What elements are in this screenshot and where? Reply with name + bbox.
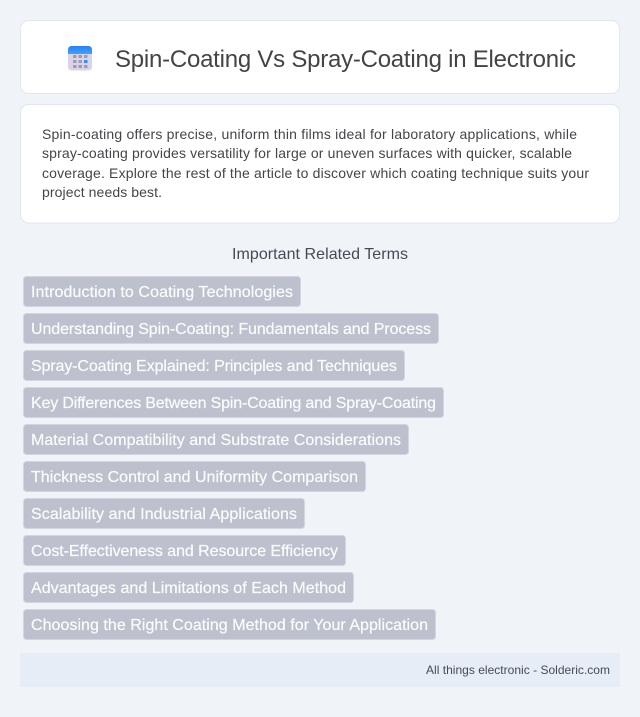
text block: introduction: Spin-coating offers precise, uniform thin films ideal for laboratory applications, while bbox=[42, 126, 577, 142]
tag: thickness control bbox=[24, 462, 366, 492]
tag: introduction bbox=[24, 276, 300, 306]
tag: advantages and limitations bbox=[24, 572, 354, 602]
tag: thickness control: Thickness Control and Uniformity Comparison bbox=[31, 469, 358, 486]
tag: key differences: Key Differences Between Spin-Coating and Spray-Coating bbox=[31, 395, 436, 412]
text block: introduction: spray-coating provides versatility for large or uneven surfaces with quicker, scalable bbox=[42, 145, 572, 161]
text block: introduction: project needs best. bbox=[42, 184, 162, 200]
text block: introduction bbox=[42, 126, 589, 200]
tag: understanding spin-coating: Understanding Spin-Coating: Fundamentals and Process bbox=[31, 321, 431, 338]
tag: spray-coating explained: Spray-Coating Explained: Principles and Techniques bbox=[31, 358, 397, 375]
text block: introduction: coverage. Explore the rest of the article to discover which coating technique suits your bbox=[42, 165, 589, 181]
tag: key differences bbox=[24, 388, 444, 418]
tag: material compatibility bbox=[24, 424, 408, 454]
panel: title card bbox=[20, 20, 620, 94]
tag: material compatibility: Material Compatibility and Substrate Considerations bbox=[31, 432, 401, 449]
icon: calendar bbox=[68, 46, 92, 70]
tag: understanding spin-coating bbox=[24, 314, 438, 344]
footer credit: All things electronic - Solderic.com bbox=[426, 663, 610, 677]
tag: cost-effectiveness bbox=[24, 536, 346, 566]
tag: spray-coating explained bbox=[24, 350, 404, 380]
tag: scalability bbox=[24, 498, 304, 528]
tag: choosing the right method: Choosing the Right Coating Method for Your Application bbox=[31, 617, 428, 634]
tag: choosing the right method bbox=[24, 610, 436, 640]
heading: important related terms: Important Related Terms bbox=[232, 246, 408, 263]
tag: scalability: Scalability and Industrial Applications bbox=[31, 506, 297, 523]
tag: advantages and limitations: Advantages and Limitations of Each Method bbox=[31, 580, 346, 597]
panel: introduction bbox=[20, 104, 620, 223]
list: related terms bbox=[24, 276, 444, 640]
title: Spin-Coating Vs Spray-Coating in Electronic bbox=[115, 46, 576, 73]
tag: introduction: Introduction to Coating Technologies bbox=[31, 284, 293, 301]
tag: cost-effectiveness: Cost-Effectiveness and Resource Efficiency bbox=[31, 543, 338, 560]
footer bbox=[20, 653, 620, 687]
